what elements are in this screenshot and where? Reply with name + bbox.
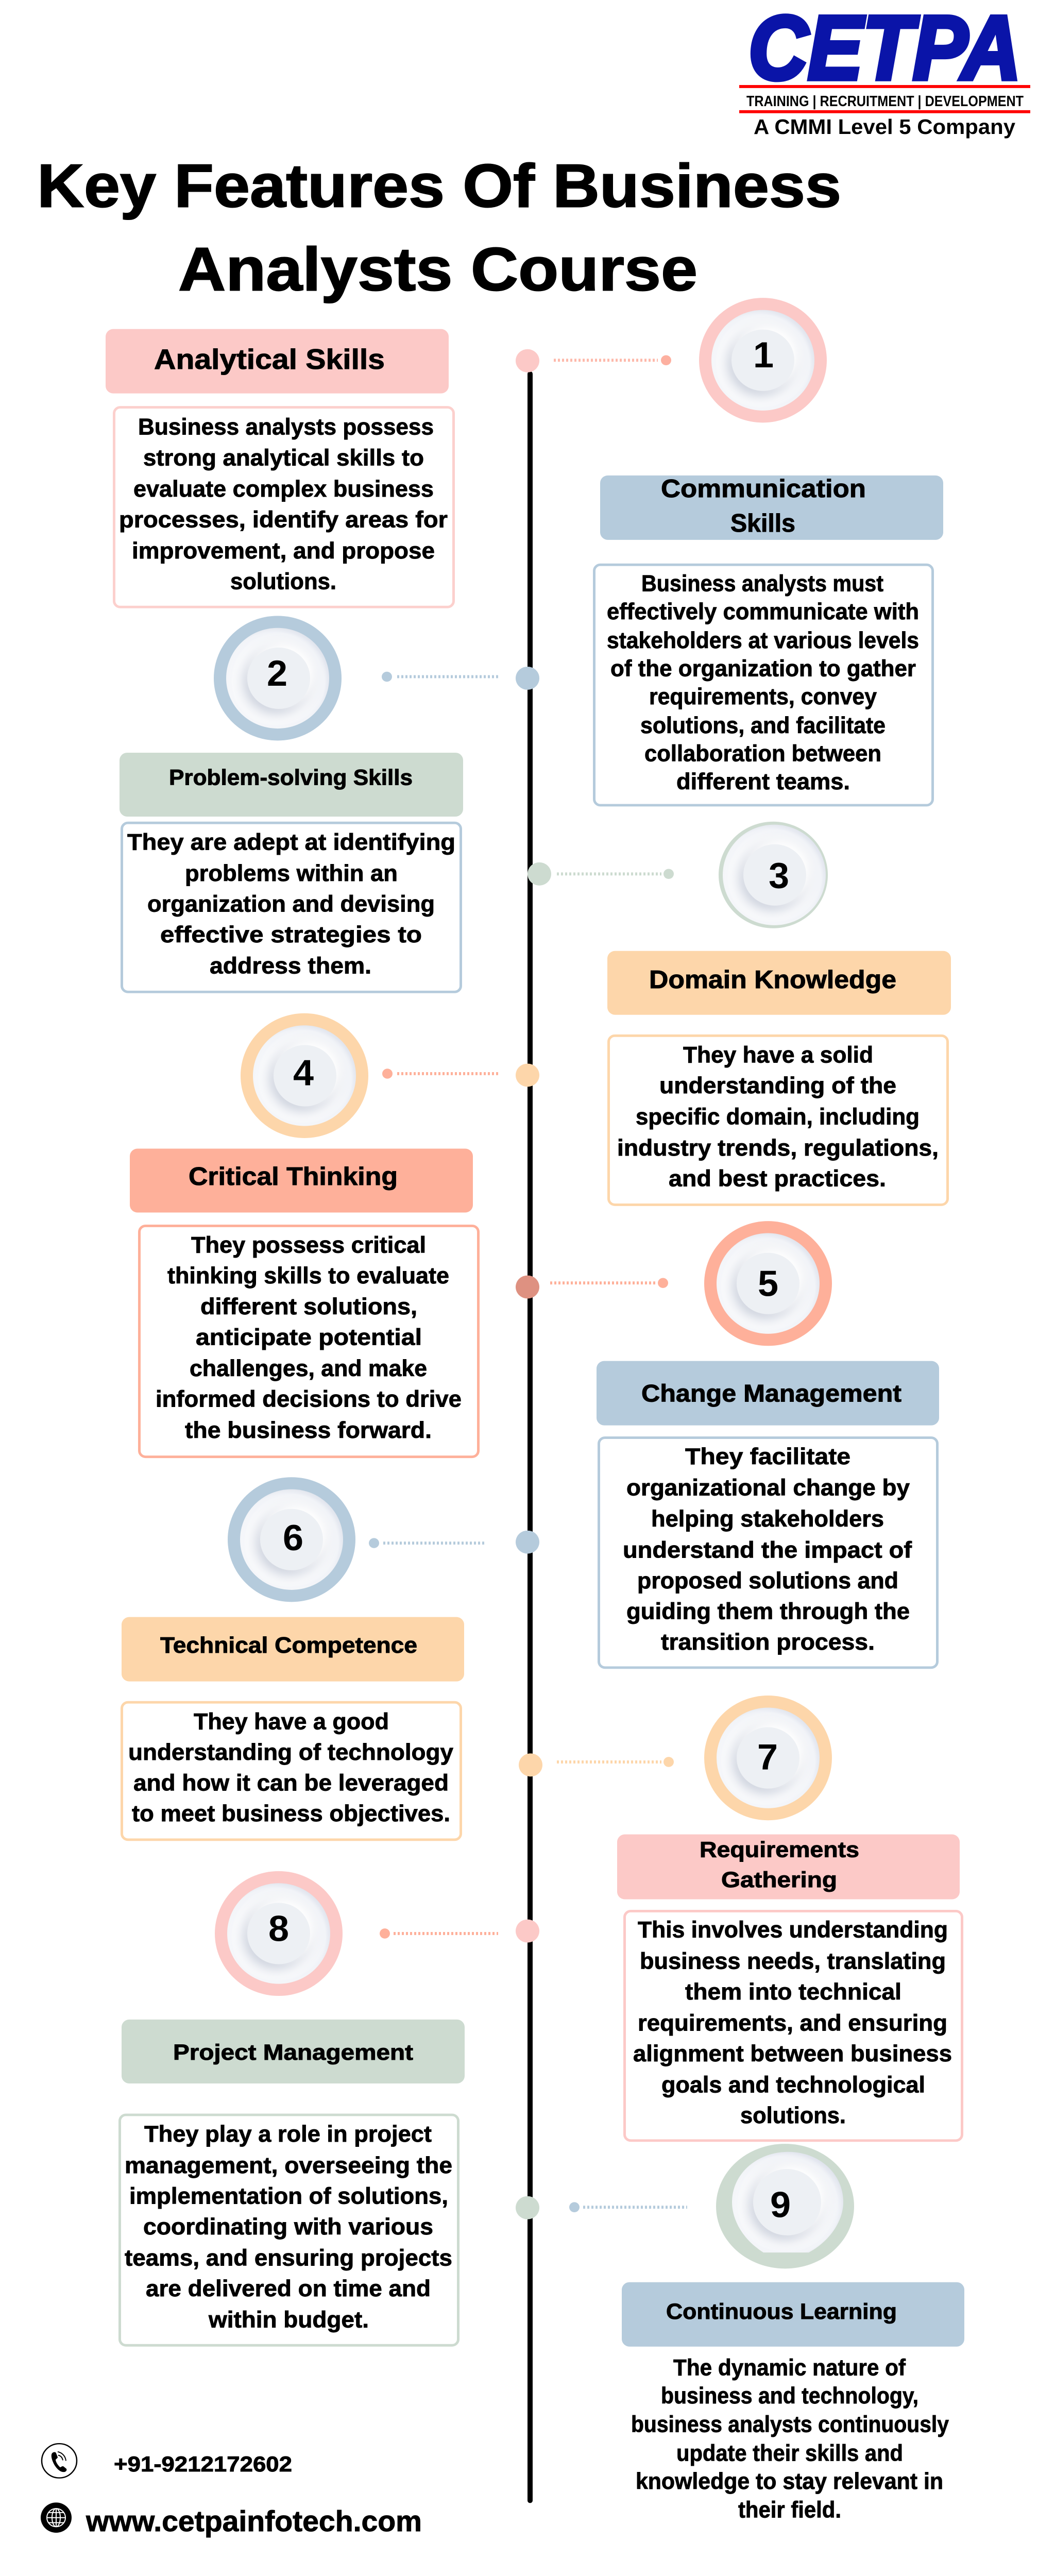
number badge 2: 2 xyxy=(267,654,287,694)
panel: Requirements Gathering xyxy=(617,1835,962,2141)
text block xyxy=(114,408,453,607)
phone number: +91-9212172602 xyxy=(114,2452,292,2477)
text block xyxy=(594,565,932,805)
text block: organizational change by xyxy=(626,1475,910,1500)
number badge 6: 6 xyxy=(283,1518,303,1558)
logo: CETPA xyxy=(739,0,1030,139)
text block: solutions, and facilitate xyxy=(640,712,886,738)
heading xyxy=(122,2020,465,2083)
text block: strong analytical skills to xyxy=(143,445,424,470)
text block: management, overseeing the xyxy=(125,2152,452,2178)
text block: They have a solid xyxy=(683,1042,873,1067)
panel: Technical Competence xyxy=(122,1617,464,1840)
timeline node 5 with connector xyxy=(516,1276,668,1299)
text block xyxy=(599,1438,938,1668)
text block: implementation of solutions, xyxy=(129,2183,448,2209)
text block: solutions. xyxy=(230,568,336,594)
text block xyxy=(631,2354,949,2523)
heading: Requirements xyxy=(700,1838,859,1862)
text block: anticipate potential xyxy=(196,1324,422,1350)
text block: processes, identify areas for xyxy=(119,506,448,532)
text block: requirements, convey xyxy=(649,684,877,709)
heading xyxy=(130,1148,473,1213)
text block xyxy=(624,1911,962,2141)
number badge 7: 7 xyxy=(757,1737,778,1777)
icon: phone xyxy=(42,2444,77,2478)
text block: improvement, and propose xyxy=(132,537,435,564)
text block: different teams. xyxy=(676,769,850,794)
text block: They facilitate xyxy=(685,1443,850,1469)
heading xyxy=(617,1835,960,1900)
text block: requirements, and ensuring xyxy=(638,2010,947,2036)
text block: the business forward. xyxy=(185,1417,432,1443)
text block: within budget. xyxy=(208,2307,369,2332)
text block: evaluate complex business xyxy=(133,476,434,502)
timeline node 4 with connector xyxy=(382,1063,539,1087)
text block: business analysts continuously xyxy=(631,2411,949,2437)
text block: understanding of technology xyxy=(128,1739,454,1765)
text block: address them. xyxy=(210,953,371,979)
number badge 4: 4 xyxy=(293,1053,314,1093)
number badge 4 xyxy=(241,1013,368,1138)
heading: Gathering xyxy=(721,1868,837,1892)
heading xyxy=(607,951,951,1015)
icon: globe xyxy=(41,2502,72,2533)
panel: Domain Knowledge xyxy=(607,951,951,1205)
heading: Critical Thinking xyxy=(189,1162,398,1191)
text block xyxy=(139,1226,478,1457)
text block: update their skills and xyxy=(676,2440,903,2466)
panel: Critical Thinking xyxy=(130,1148,478,1457)
text block: proposed solutions and xyxy=(637,1567,898,1594)
text block: business needs, translating xyxy=(640,1948,946,1974)
panel: Problem-solving Skills xyxy=(120,753,463,992)
text block: stakeholders at various levels xyxy=(607,627,919,653)
text block: are delivered on time and xyxy=(146,2276,431,2301)
text block: teams, and ensuring projects xyxy=(125,2245,452,2270)
panel: Project Management xyxy=(120,2020,465,2345)
timeline node 6 with connector xyxy=(369,1531,539,1554)
text block: knowledge to stay relevant in xyxy=(636,2468,943,2494)
text block: understand the impact of xyxy=(623,1537,912,1563)
heading xyxy=(622,2282,964,2347)
number badge 9: 9 xyxy=(770,2185,791,2226)
text block: to meet business objectives. xyxy=(132,1801,450,1826)
text block: understanding of the xyxy=(659,1073,896,1098)
text block: They play a role in project xyxy=(144,2121,432,2147)
timeline node 9 with connector xyxy=(516,2196,687,2219)
text block xyxy=(122,823,461,992)
timeline node 8 with connector xyxy=(380,1920,539,1943)
text block: solutions. xyxy=(740,2103,846,2128)
number badge 7 xyxy=(704,1696,832,1820)
number badge 5: 5 xyxy=(758,1264,778,1304)
number badge 8 xyxy=(215,1871,343,1996)
panel: Continuous Learning xyxy=(622,2282,964,2523)
text block: effective strategies to xyxy=(160,922,422,947)
heading xyxy=(106,329,449,394)
number badge 5 xyxy=(704,1221,832,1346)
heading xyxy=(597,1361,939,1426)
text block: effectively communicate with xyxy=(607,599,919,624)
text block xyxy=(120,2115,458,2345)
text block: different solutions, xyxy=(200,1293,417,1319)
heading: Skills xyxy=(730,510,795,537)
number badge 3 xyxy=(719,822,828,928)
number badge 1 xyxy=(699,298,827,422)
text block: challenges, and make xyxy=(190,1355,427,1381)
text block: The dynamic nature of xyxy=(673,2354,906,2380)
heading xyxy=(120,753,463,817)
text block: helping stakeholders xyxy=(651,1505,884,1532)
heading xyxy=(600,474,943,540)
website: www.cetpainfotech.com xyxy=(86,2505,422,2538)
text block: specific domain, including xyxy=(636,1104,920,1129)
text block: industry trends, regulations, xyxy=(617,1135,939,1161)
heading xyxy=(122,1617,464,1682)
text block: collaboration between xyxy=(644,740,881,766)
timeline node 2 with connector xyxy=(382,667,539,690)
text block: They possess critical xyxy=(191,1232,426,1258)
text block: coordinating with various xyxy=(143,2213,433,2240)
text block: Business analysts must xyxy=(641,570,883,596)
timeline line xyxy=(528,371,533,2503)
number badge 1: 1 xyxy=(753,335,774,376)
panel: Change Management xyxy=(597,1361,939,1668)
timeline node 3 with connector xyxy=(528,862,674,886)
heading: Change Management xyxy=(641,1380,901,1408)
title: Analysts Course xyxy=(178,235,697,303)
text block: informed decisions to drive xyxy=(156,1386,462,1412)
text block: They have a good xyxy=(194,1708,389,1734)
text block: and how it can be leveraged xyxy=(133,1770,449,1795)
number badge 2 xyxy=(214,616,342,741)
text block: Business analysts possess xyxy=(138,414,434,440)
text block: business and technology, xyxy=(661,2383,918,2409)
heading: Communication xyxy=(661,474,866,503)
number badge 9 xyxy=(716,2144,854,2268)
heading: Continuous Learning xyxy=(666,2299,897,2324)
heading: Problem-solving Skills xyxy=(169,766,413,790)
text block: They are adept at identifying xyxy=(127,829,455,855)
timeline node 1 with connector xyxy=(516,349,671,372)
text block: problems within an xyxy=(185,860,398,886)
number badge 3: 3 xyxy=(769,856,789,896)
text block: This involves understanding xyxy=(638,1917,948,1943)
text block: thinking skills to evaluate xyxy=(167,1263,449,1289)
heading: Project Management xyxy=(173,2041,413,2065)
text block xyxy=(609,1036,948,1205)
text block xyxy=(122,1702,461,1840)
panel: Communication Skills xyxy=(594,474,943,805)
text block: transition process. xyxy=(661,1629,875,1655)
text block: of the organization to gather xyxy=(610,655,916,681)
text block: goals and technological xyxy=(661,2072,925,2097)
text block: alignment between business xyxy=(633,2040,952,2066)
title: Key Features Of Business xyxy=(37,151,841,220)
heading: Domain Knowledge xyxy=(649,965,896,994)
heading: Analytical Skills xyxy=(154,343,385,375)
text block: guiding them through the xyxy=(626,1598,910,1624)
text block: them into technical xyxy=(685,1978,901,2005)
heading: Technical Competence xyxy=(160,1633,417,1658)
text block: organization and devising xyxy=(147,891,435,917)
timeline node 7 with connector xyxy=(519,1753,674,1776)
title xyxy=(37,151,841,303)
panel: Analytical Skills xyxy=(106,329,453,607)
logo subline: A CMMI Level 5 Company xyxy=(754,114,1015,139)
number badge 6 xyxy=(228,1477,355,1602)
text block: and best practices. xyxy=(669,1165,886,1192)
number badge 8: 8 xyxy=(268,1909,289,1949)
text block: their field. xyxy=(738,2497,841,2523)
